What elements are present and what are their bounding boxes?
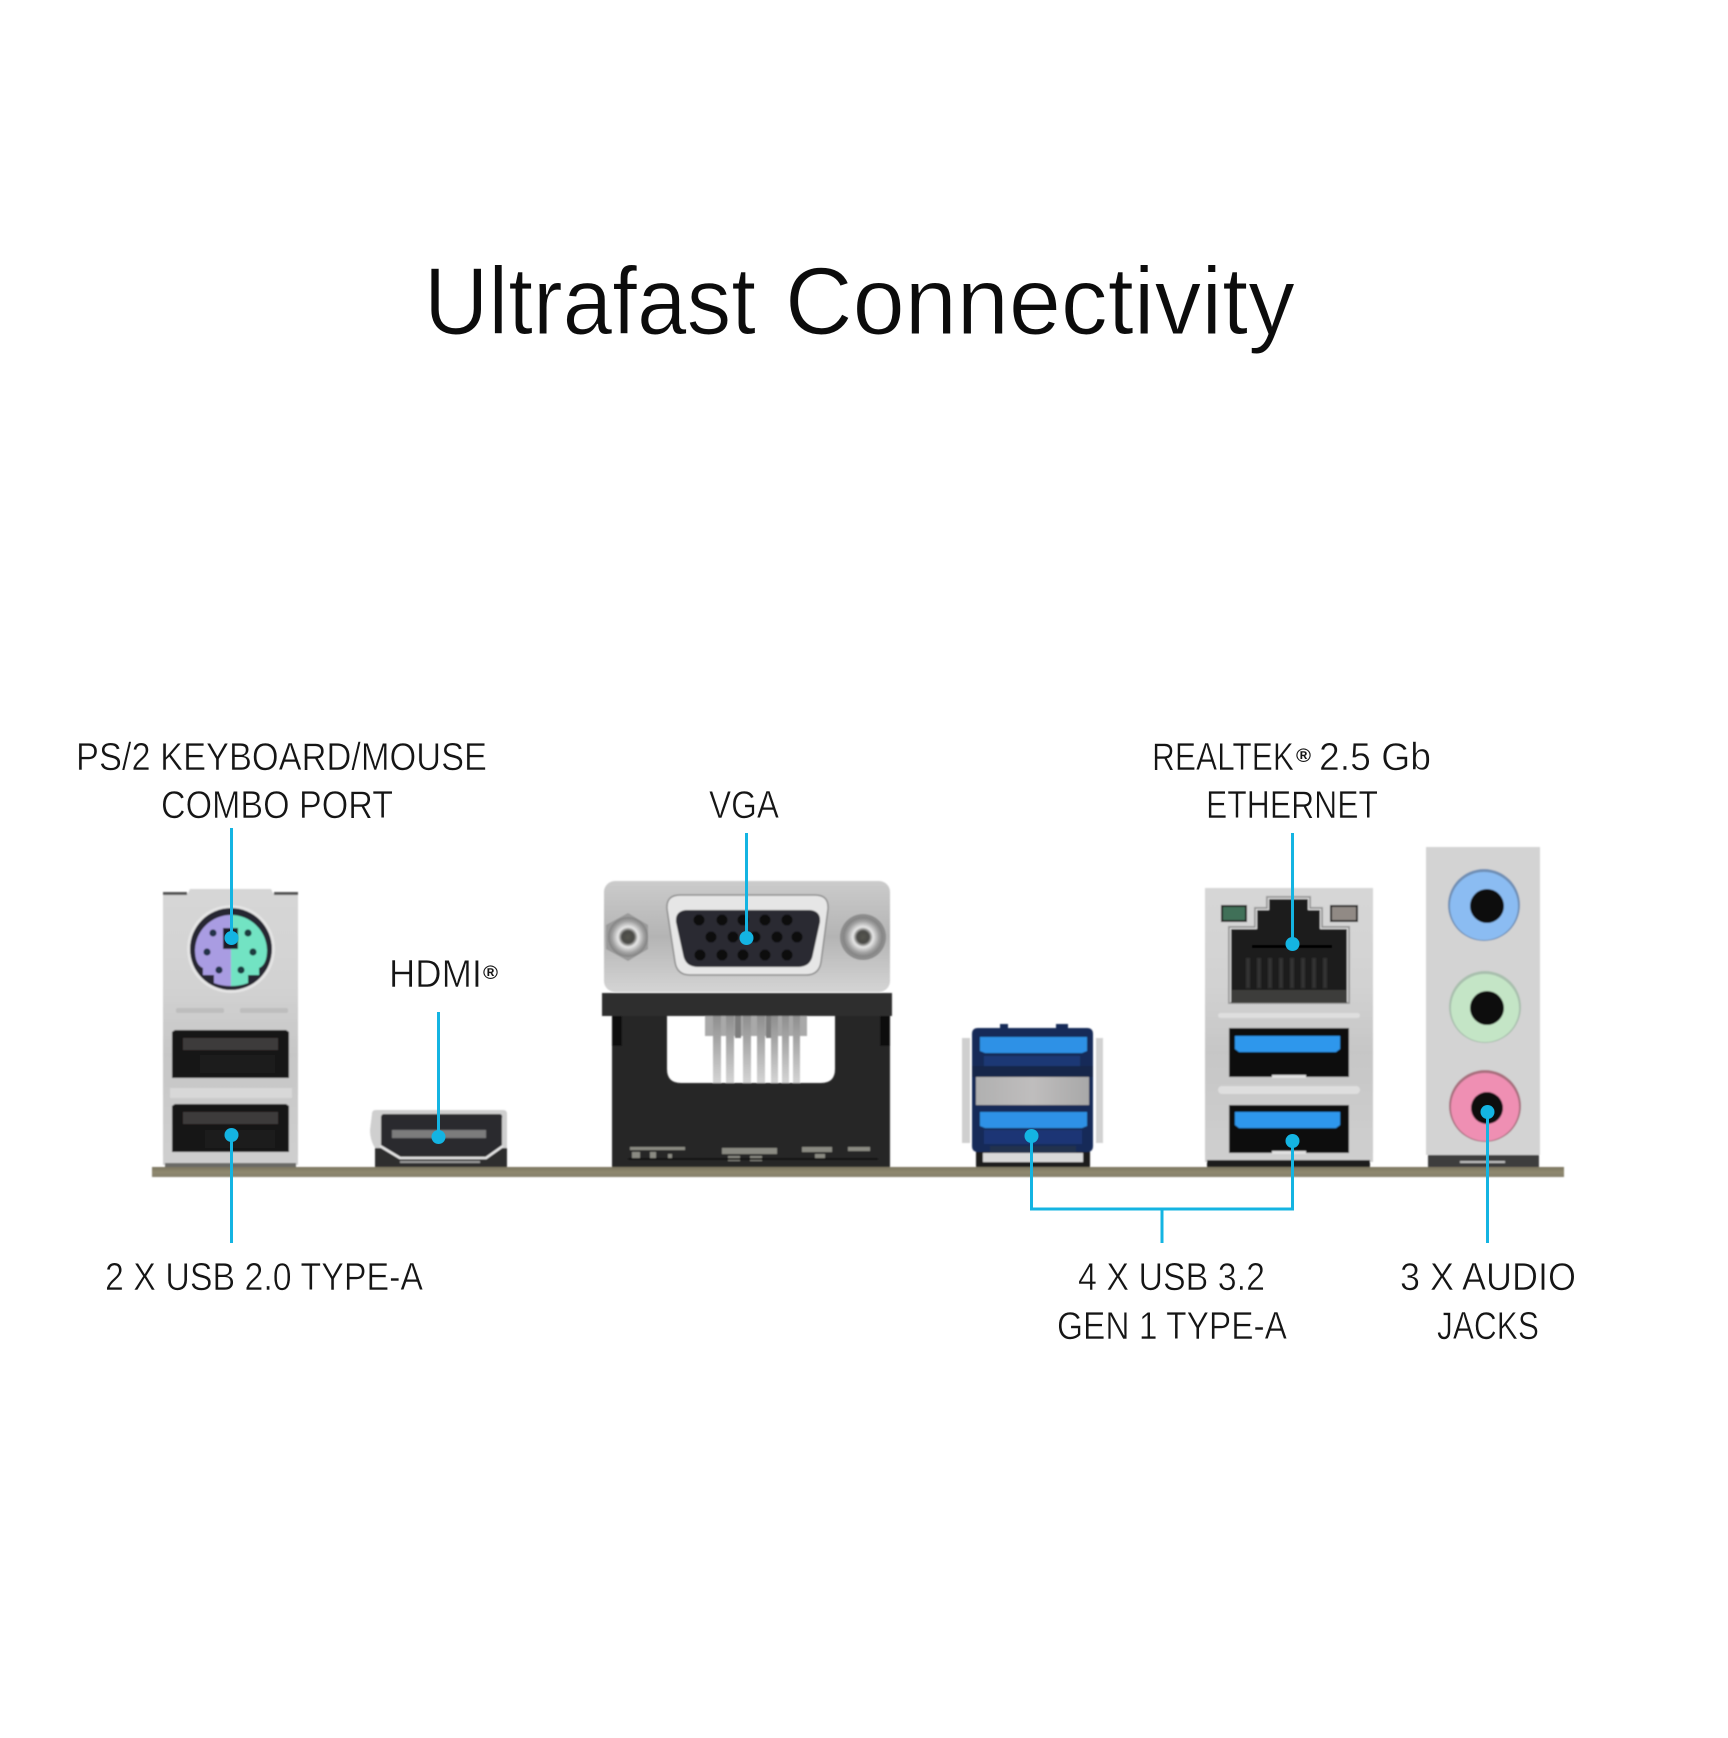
USB tongue upper (980, 1037, 1087, 1053)
leader: audio (1480, 1105, 1494, 1243)
label: PS/2: COMBO PORT (161, 784, 393, 827)
circuit board edge (152, 1167, 1564, 1177)
label: USB 2.0: 2 X USB 2.0 TYPE-A (105, 1256, 423, 1299)
leader: VGA (740, 833, 754, 945)
icon: right screw (840, 914, 886, 960)
icon: USB 2.0 port upper (172, 1030, 289, 1078)
silver separator (976, 1077, 1089, 1105)
title: Connectivity (785, 248, 1295, 355)
rear I/O panel illustration (152, 847, 1564, 1177)
port: audio jacks (1426, 847, 1540, 1167)
label: Ethernet (1152, 736, 1431, 827)
label: Ethernet: ETHERNET (1206, 784, 1378, 827)
icon: USB 3.2 port lower (1229, 1105, 1349, 1154)
metal bracket (163, 889, 298, 1165)
label: HDMI: ® (483, 963, 498, 984)
icon: amber LED (1331, 906, 1357, 921)
icon: green jack (1449, 971, 1521, 1043)
leader: USB 2.0 (224, 1128, 238, 1243)
leader: USB 3.2 bracket (1024, 1129, 1300, 1243)
socket holes (694, 914, 802, 960)
label: Ethernet: 2.5 Gb (1319, 736, 1431, 779)
label: VGA: VGA (709, 784, 779, 827)
icon: left screw (606, 913, 648, 961)
leader: PS/2 (224, 828, 238, 945)
label: USB 3.2: GEN 1 TYPE-A (1057, 1305, 1287, 1348)
icon: blue jack (1448, 869, 1520, 941)
title: Ultrafast (424, 248, 756, 355)
leader: Ethernet (1286, 833, 1300, 951)
metal bracket (1426, 847, 1540, 1155)
metal plate (604, 881, 890, 992)
title (424, 248, 1295, 355)
label: audio: JACKS (1437, 1305, 1539, 1348)
plastic body (612, 1016, 890, 1167)
D-sub shell (667, 895, 828, 975)
label: HDMI: HDMI (389, 953, 482, 996)
leader: HDMI (432, 1012, 446, 1144)
USB tongue lower (980, 1112, 1087, 1128)
icon: PS/2 socket (187, 905, 275, 993)
port: stacked USB 3.2 (962, 1024, 1103, 1167)
label: audio: 3 X AUDIO (1400, 1256, 1576, 1299)
side rails (962, 1038, 970, 1143)
icon: green LED (1222, 906, 1246, 921)
icon: pink jack (1449, 1070, 1521, 1142)
icon: USB 3.2 port upper (1229, 1028, 1349, 1078)
port: HDMI (370, 1110, 507, 1167)
port: Ethernet and USB 3.2 stack (1205, 888, 1373, 1167)
icon: USB 2.0 port lower (172, 1104, 289, 1152)
connector pins (705, 1016, 807, 1083)
label: PS/2: PS/2 KEYBOARD/MOUSE (76, 736, 487, 779)
D-sub socket (676, 910, 820, 967)
label: USB 3.2: 4 X USB 3.2 (1078, 1256, 1265, 1299)
label: Ethernet: REALTEK (1152, 736, 1294, 779)
label: Ethernet: ® (1296, 746, 1311, 767)
metal bracket (1205, 888, 1373, 1162)
port: PS/2 and USB 2.0 stack (163, 889, 298, 1167)
surface-mount solder detail (630, 1147, 870, 1161)
icon: RJ45 socket (1229, 897, 1349, 1003)
port: VGA (602, 881, 892, 1167)
